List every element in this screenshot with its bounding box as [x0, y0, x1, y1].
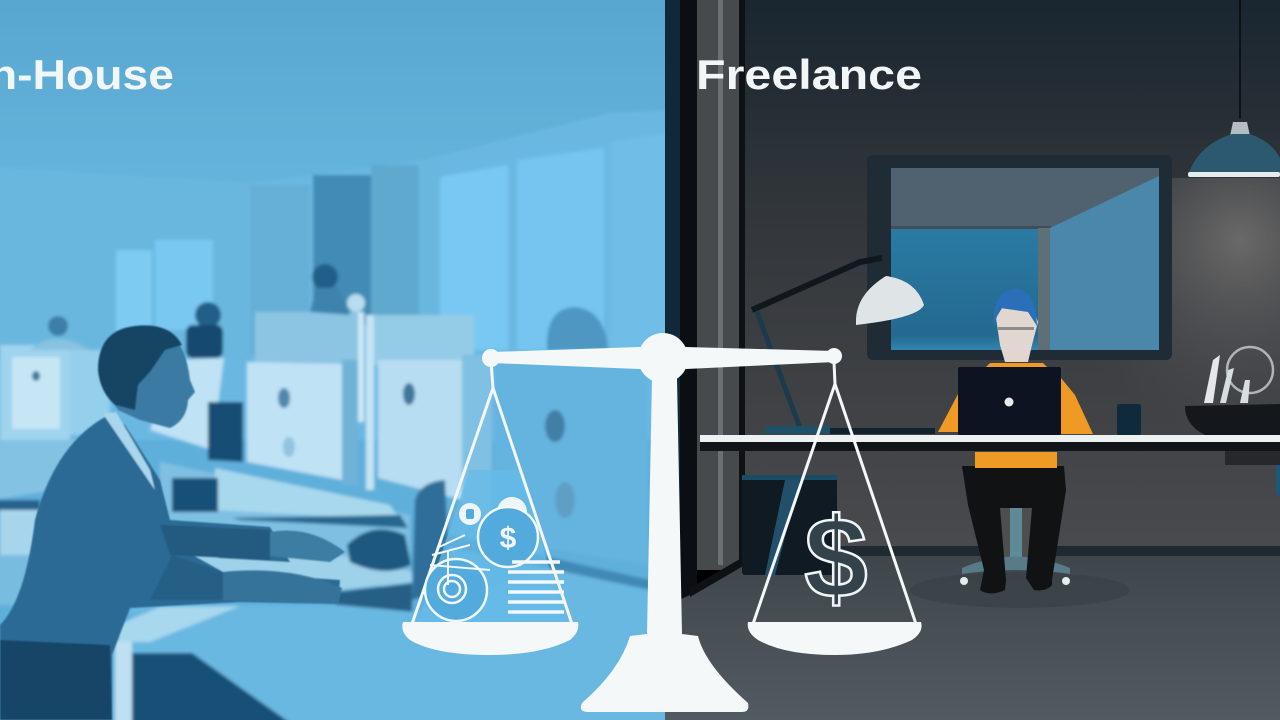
pan strings	[412, 362, 916, 624]
background people	[30, 264, 608, 358]
left pan	[402, 622, 578, 655]
title: Freelance: Freelance	[696, 51, 922, 98]
icon: coins	[425, 497, 564, 621]
floor	[840, 546, 1280, 556]
monitors	[0, 345, 70, 440]
icon: pendant lamp	[1188, 0, 1280, 177]
panel: freelance studio	[665, 0, 1280, 720]
column and base	[581, 378, 748, 712]
icon: coins: $	[500, 522, 517, 555]
ceiling	[0, 0, 665, 142]
main desk front	[130, 565, 675, 720]
legs	[962, 466, 1066, 594]
desks in the background	[0, 438, 76, 500]
headphones clutter	[347, 529, 411, 571]
laptop	[958, 367, 1061, 435]
water bottle	[412, 480, 450, 600]
icon: balance scale	[402, 333, 922, 712]
keyboard	[335, 582, 414, 613]
icon: freelancer at laptop	[938, 289, 1093, 594]
lamp glow	[1172, 178, 1280, 372]
icon: speaker box under desk	[742, 475, 837, 575]
desk area	[0, 440, 675, 720]
back wall	[0, 167, 250, 360]
torso	[975, 452, 1057, 468]
icon: dollar sign: $	[804, 495, 868, 622]
panel: in-house office	[0, 0, 675, 720]
head	[996, 308, 1038, 362]
desk	[700, 435, 1280, 495]
coin area tint	[418, 470, 565, 622]
icon: mug	[1117, 404, 1141, 435]
chair	[1003, 546, 1029, 557]
window	[867, 155, 1172, 360]
doorway frame	[665, 0, 745, 600]
icon: man at desk	[0, 325, 345, 720]
icon: tool holder	[1185, 347, 1280, 435]
windows	[440, 165, 508, 350]
apple logos	[278, 388, 290, 408]
beam	[492, 347, 835, 369]
right pan	[748, 622, 922, 655]
icon: desk lamp	[752, 258, 935, 434]
